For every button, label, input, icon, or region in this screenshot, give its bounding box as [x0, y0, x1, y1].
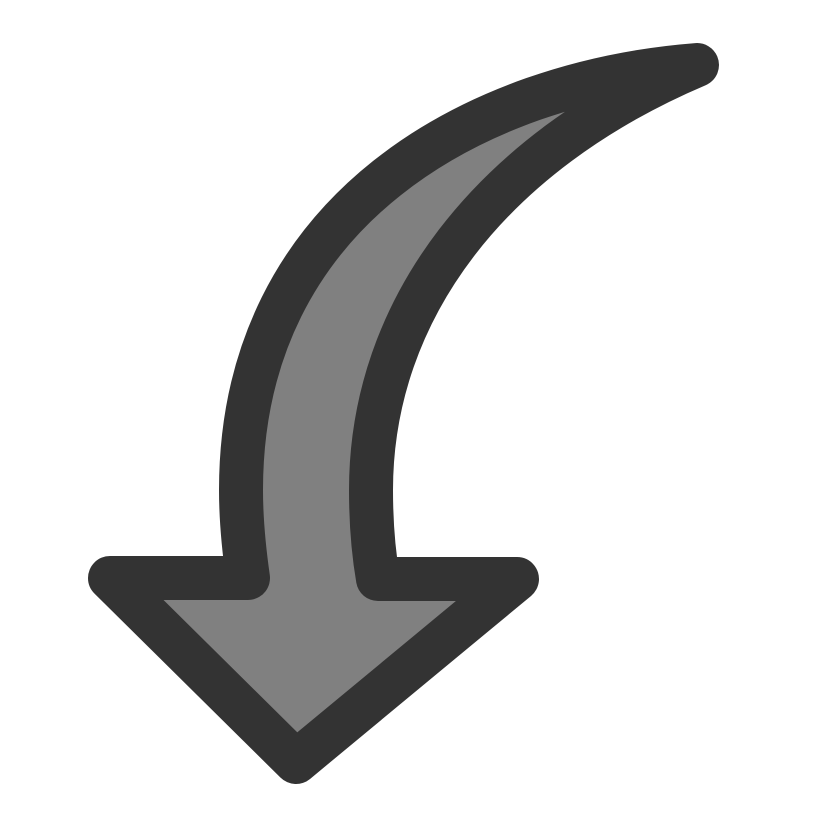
icon: curved arrow pointing down — [110, 65, 697, 762]
